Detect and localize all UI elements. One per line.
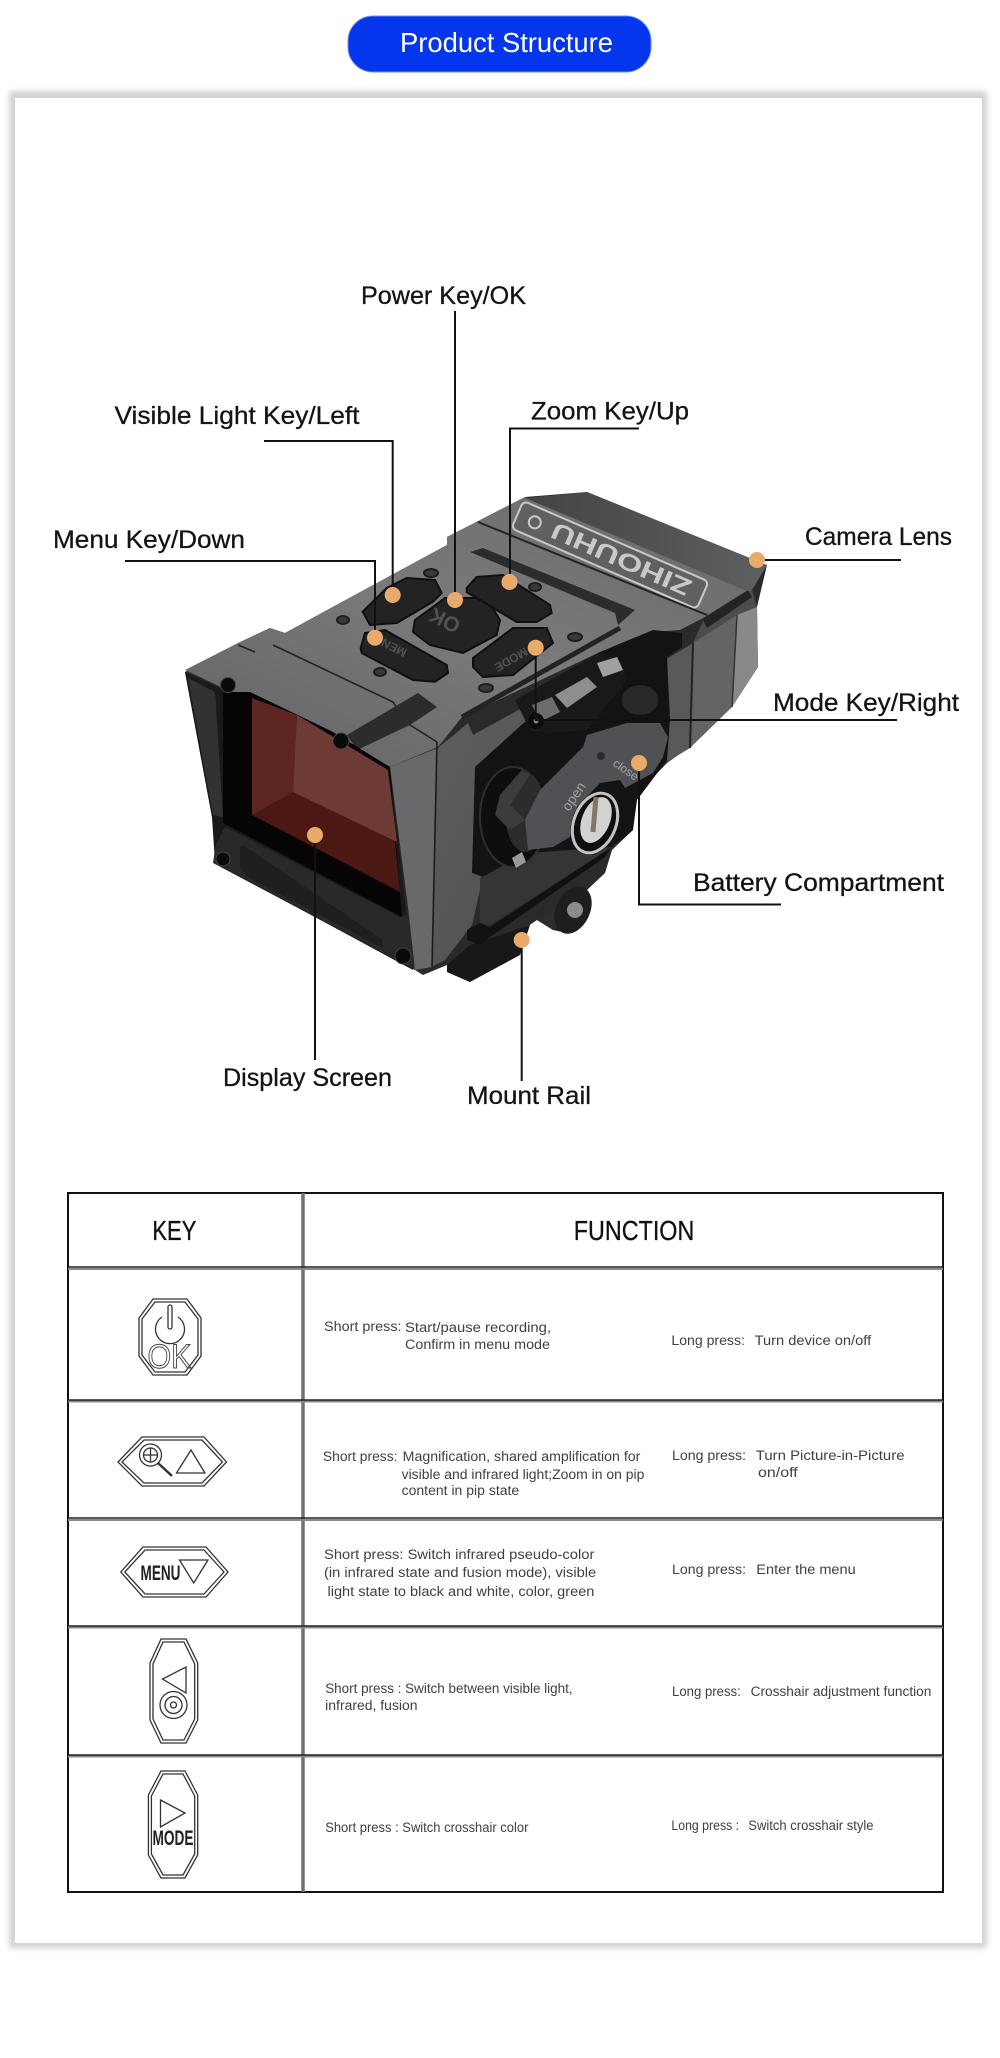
table grid <box>68 1193 943 1892</box>
narrow side panel <box>390 748 438 970</box>
dark top strip <box>347 693 437 750</box>
keypad buttons <box>361 575 553 682</box>
battery cap: close <box>610 756 642 784</box>
display opening <box>223 692 402 917</box>
latch knob <box>480 767 546 868</box>
row 3 text: (in infrared state and fusion mode), visible <box>324 1565 596 1580</box>
heading: key: KEY <box>152 1215 197 1246</box>
row 1 text <box>324 1319 871 1352</box>
button: visible light <box>363 578 442 625</box>
row 4 text: Long press: <box>672 1684 741 1699</box>
row 1 text: Start/pause recording, <box>405 1320 551 1335</box>
display screen glass <box>252 698 400 892</box>
row 3 text: light state to black and white, color, green <box>328 1584 594 1599</box>
icon: menu key: MENU <box>140 1562 180 1585</box>
icon: mode key <box>148 1771 198 1878</box>
button: zoom <box>467 575 552 622</box>
row 5 text: Switch crosshair style <box>748 1818 874 1833</box>
camera hood band <box>525 492 767 590</box>
callout: visible light key: Visible Light Key/Left <box>114 402 360 430</box>
callout: mode key <box>528 640 959 720</box>
row 4 text: Short press : Switch between visible light, <box>325 1681 573 1696</box>
function table <box>68 1193 943 1892</box>
device silhouette <box>185 492 767 982</box>
row 4 text: infrared, fusion <box>325 1698 418 1713</box>
row 2 text: Short press: <box>323 1449 398 1464</box>
row 3 text: Short press: Switch infrared pseudo-color <box>324 1547 595 1562</box>
row 4 text: Crosshair adjustment function <box>751 1684 931 1699</box>
logo plate <box>511 501 709 609</box>
button legends <box>371 602 530 675</box>
title <box>348 16 651 72</box>
callout: battery compartment <box>631 755 944 904</box>
row 1 text: Turn device on/off <box>755 1333 871 1348</box>
callout: power key: Power Key/OK <box>361 282 526 310</box>
front corner screws <box>216 678 411 964</box>
row 2 text: Magnification, shared amplification for <box>403 1449 641 1464</box>
row 5 text <box>325 1818 874 1835</box>
button legends: MODE <box>492 644 530 675</box>
callout: mode key: Mode Key/Right <box>773 689 959 717</box>
title: Product Structure <box>400 27 613 58</box>
icon: mode key: MODE <box>152 1827 194 1850</box>
button: mode <box>473 628 553 677</box>
callout: visible light key <box>114 402 401 603</box>
row 3 text: Long press: <box>672 1562 746 1577</box>
row 2 text: content in pip state <box>402 1483 519 1498</box>
row 4 text <box>325 1681 931 1713</box>
button: power OK <box>413 598 500 653</box>
lens shoulder <box>693 590 757 643</box>
row 1 text: Short press: <box>324 1319 402 1334</box>
callout: display screen <box>223 827 392 1092</box>
row 2 text: on/off <box>758 1465 798 1480</box>
battery cap: open <box>558 779 589 814</box>
hinge <box>515 652 658 733</box>
icon: OK key: OK <box>148 1338 192 1376</box>
callout: zoom key <box>502 398 689 590</box>
heading: function: FUNCTION <box>574 1215 694 1246</box>
device photo <box>185 492 767 982</box>
icon: zoom key <box>118 1437 226 1486</box>
callout: menu key: Menu Key/Down <box>53 526 245 554</box>
callout: menu key <box>53 526 383 646</box>
hood left wall <box>188 678 223 817</box>
mount rail <box>447 847 612 982</box>
row 3 text: Enter the menu <box>756 1562 856 1577</box>
front frame <box>185 672 413 970</box>
callout: power key <box>361 282 526 608</box>
chamfer <box>703 590 752 628</box>
row 2 text <box>323 1448 904 1498</box>
callout: camera lens <box>749 523 952 568</box>
button legends: OK <box>426 602 464 637</box>
button legends: MENU <box>371 631 409 660</box>
top face <box>185 497 752 767</box>
row 1 text: Long press: <box>671 1333 745 1348</box>
row 2 text: Turn Picture-in-Picture <box>756 1448 904 1463</box>
key plate screws <box>337 569 582 692</box>
callout: battery compartment: Battery Compartment <box>693 869 944 897</box>
battery plate <box>472 630 682 877</box>
lower frame <box>215 827 415 970</box>
row 3 text <box>324 1547 856 1599</box>
lower inset panel <box>240 845 383 948</box>
row 5 text: Short press : Switch crosshair color <box>325 1820 529 1835</box>
battery cap <box>525 723 668 862</box>
lower plate <box>480 847 612 925</box>
row 2 text: visible and infrared light;Zoom in on pip <box>402 1467 644 1482</box>
row 2 text: Long press: <box>672 1448 746 1463</box>
callout: display screen: Display Screen <box>223 1064 392 1092</box>
logo plate: ZIHOUHU <box>547 516 696 601</box>
callout: zoom key: Zoom Key/Up <box>531 398 689 426</box>
icon: menu key <box>121 1547 228 1597</box>
main side panel <box>432 665 600 967</box>
top plate grooves <box>238 522 707 742</box>
row 5 text: Long press : <box>671 1818 739 1833</box>
callout: camera lens: Camera Lens <box>805 523 952 551</box>
callout: mount rail: Mount Rail <box>467 1082 591 1110</box>
icon: visible light key <box>150 1639 198 1743</box>
callout: mount rail <box>467 932 591 1110</box>
row 1 text: Confirm in menu mode <box>405 1337 550 1352</box>
button: menu <box>361 630 448 682</box>
lens segments <box>665 607 758 762</box>
icon: OK key <box>139 1299 201 1376</box>
